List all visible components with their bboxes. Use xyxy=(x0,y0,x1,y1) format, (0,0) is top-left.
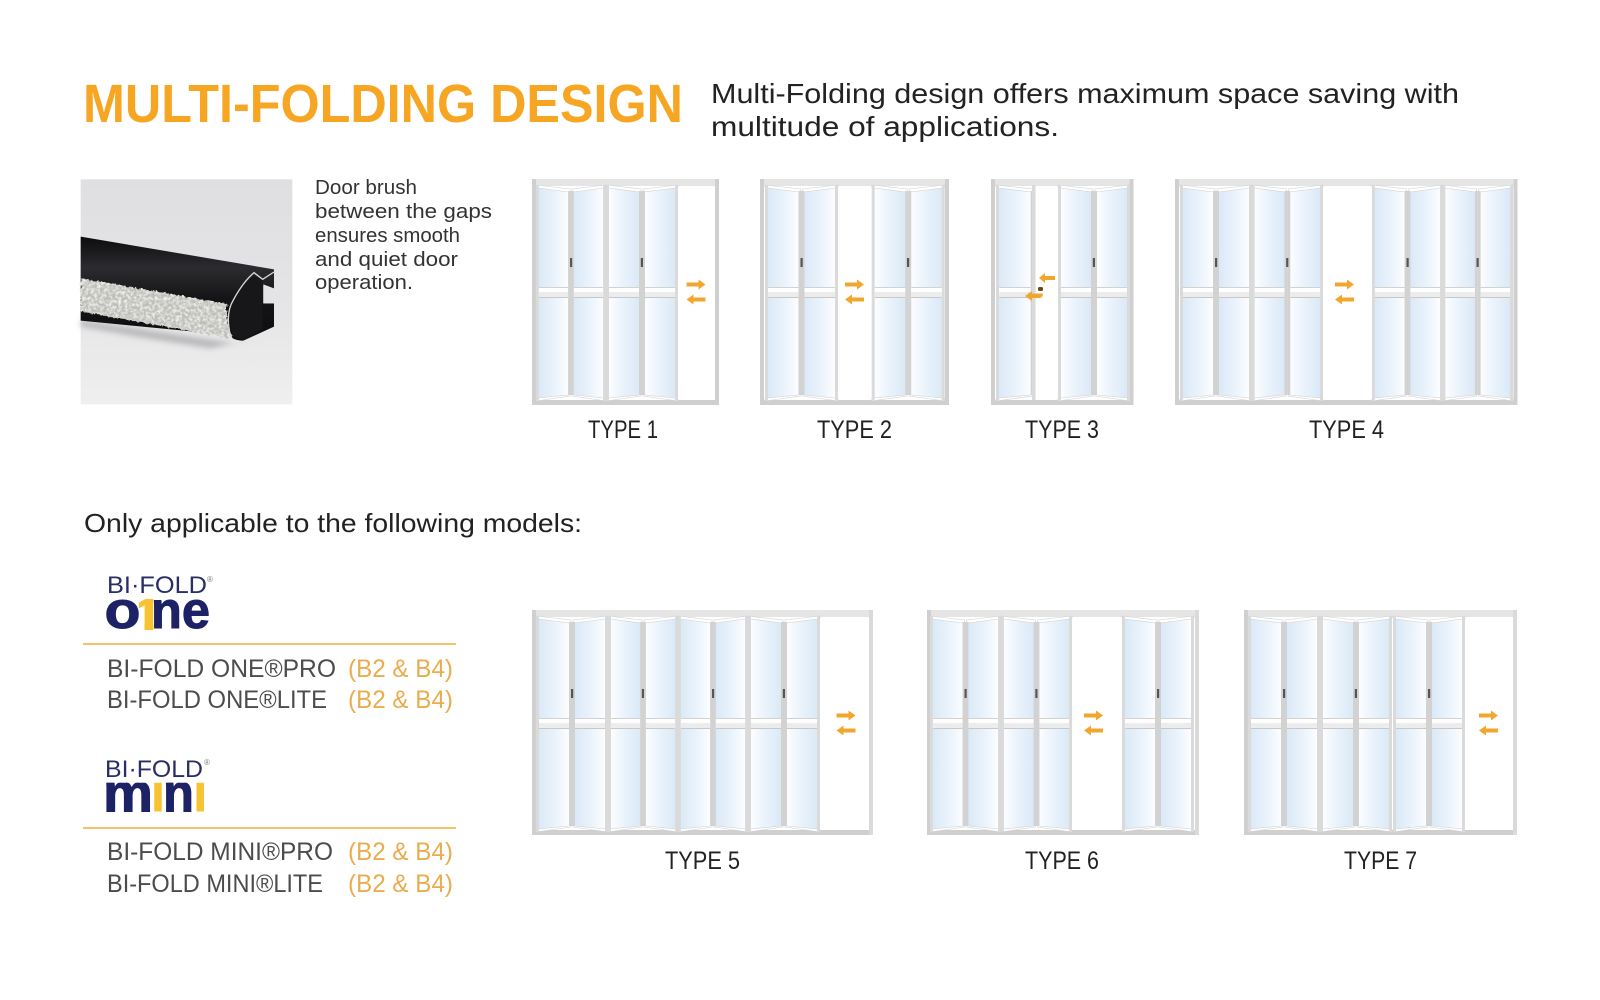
panel: type 7 door xyxy=(1244,610,1517,875)
panel: type 1 door xyxy=(532,179,719,444)
panel: type 2 door: TYPE 2 xyxy=(817,416,892,444)
logo: BI-FOLD one: 1 xyxy=(133,590,163,640)
door brush description: ensures smooth xyxy=(315,225,460,247)
panel: type 3 door xyxy=(991,179,1134,444)
logo: BI-FOLD mini: BI·FOLD xyxy=(105,756,203,783)
model list: BI-FOLD mini: (B2 & B4) xyxy=(348,838,453,866)
door brush description: Door brush xyxy=(315,177,417,199)
model list: BI-FOLD mini: (B2 & B4) xyxy=(348,870,453,898)
panel: type 2 door xyxy=(760,179,949,444)
logo: BI-FOLD mini: m xyxy=(103,762,153,824)
panel: type 7 door: TYPE 7 xyxy=(1344,847,1417,875)
section heading: Only applicable to the following models: xyxy=(84,508,582,538)
logo: BI-FOLD one: BI·FOLD xyxy=(107,572,207,599)
panel: type 6 door xyxy=(927,610,1199,875)
door brush description: and quiet door xyxy=(315,249,458,271)
intro text: multitude of applications. xyxy=(711,111,1059,142)
door brush description: between the gaps xyxy=(315,201,492,223)
model list: BI-FOLD mini: BI-FOLD MINI®PRO xyxy=(107,838,333,866)
photo: door brush profile xyxy=(81,179,292,404)
panel: type 5 door xyxy=(532,610,873,875)
divider mini xyxy=(83,827,456,829)
title: MULTI-FOLDING DESIGN xyxy=(83,74,683,134)
divider one xyxy=(83,643,456,645)
logo: BI-FOLD one xyxy=(106,576,213,630)
logo: BI-FOLD mini xyxy=(106,759,210,812)
intro text xyxy=(711,78,1459,142)
panel: type 5 door: TYPE 5 xyxy=(665,847,740,875)
logo: BI-FOLD one: ® xyxy=(207,575,213,584)
model list: BI-FOLD one xyxy=(107,655,453,714)
intro text: Multi-Folding design offers maximum space saving with xyxy=(711,78,1459,109)
model list: BI-FOLD one: BI-FOLD ONE®LITE xyxy=(107,686,327,714)
model list: BI-FOLD one: (B2 & B4) xyxy=(348,655,453,683)
logo: BI-FOLD one: ne xyxy=(151,582,210,640)
panel: type 4 door xyxy=(1175,179,1518,444)
panel: type 4 door: TYPE 4 xyxy=(1309,416,1384,444)
door brush description xyxy=(315,177,492,294)
logo: BI-FOLD one: o xyxy=(104,582,140,640)
model list: BI-FOLD one: BI-FOLD ONE®PRO xyxy=(107,655,336,683)
panel: type 1 door: TYPE 1 xyxy=(588,416,658,444)
logo: BI-FOLD mini: i xyxy=(193,762,208,824)
model list: BI-FOLD one: (B2 & B4) xyxy=(348,686,453,714)
model list: BI-FOLD mini xyxy=(107,838,453,898)
logo: BI-FOLD mini: n xyxy=(163,762,194,824)
panel: type 6 door: TYPE 6 xyxy=(1025,847,1099,875)
logo: BI-FOLD mini: i xyxy=(150,762,166,824)
model list: BI-FOLD mini: BI-FOLD MINI®LITE xyxy=(107,870,323,898)
door brush description: operation. xyxy=(315,272,413,294)
panel: type 3 door: TYPE 3 xyxy=(1025,416,1099,444)
logo: BI-FOLD mini: ® xyxy=(204,758,210,767)
